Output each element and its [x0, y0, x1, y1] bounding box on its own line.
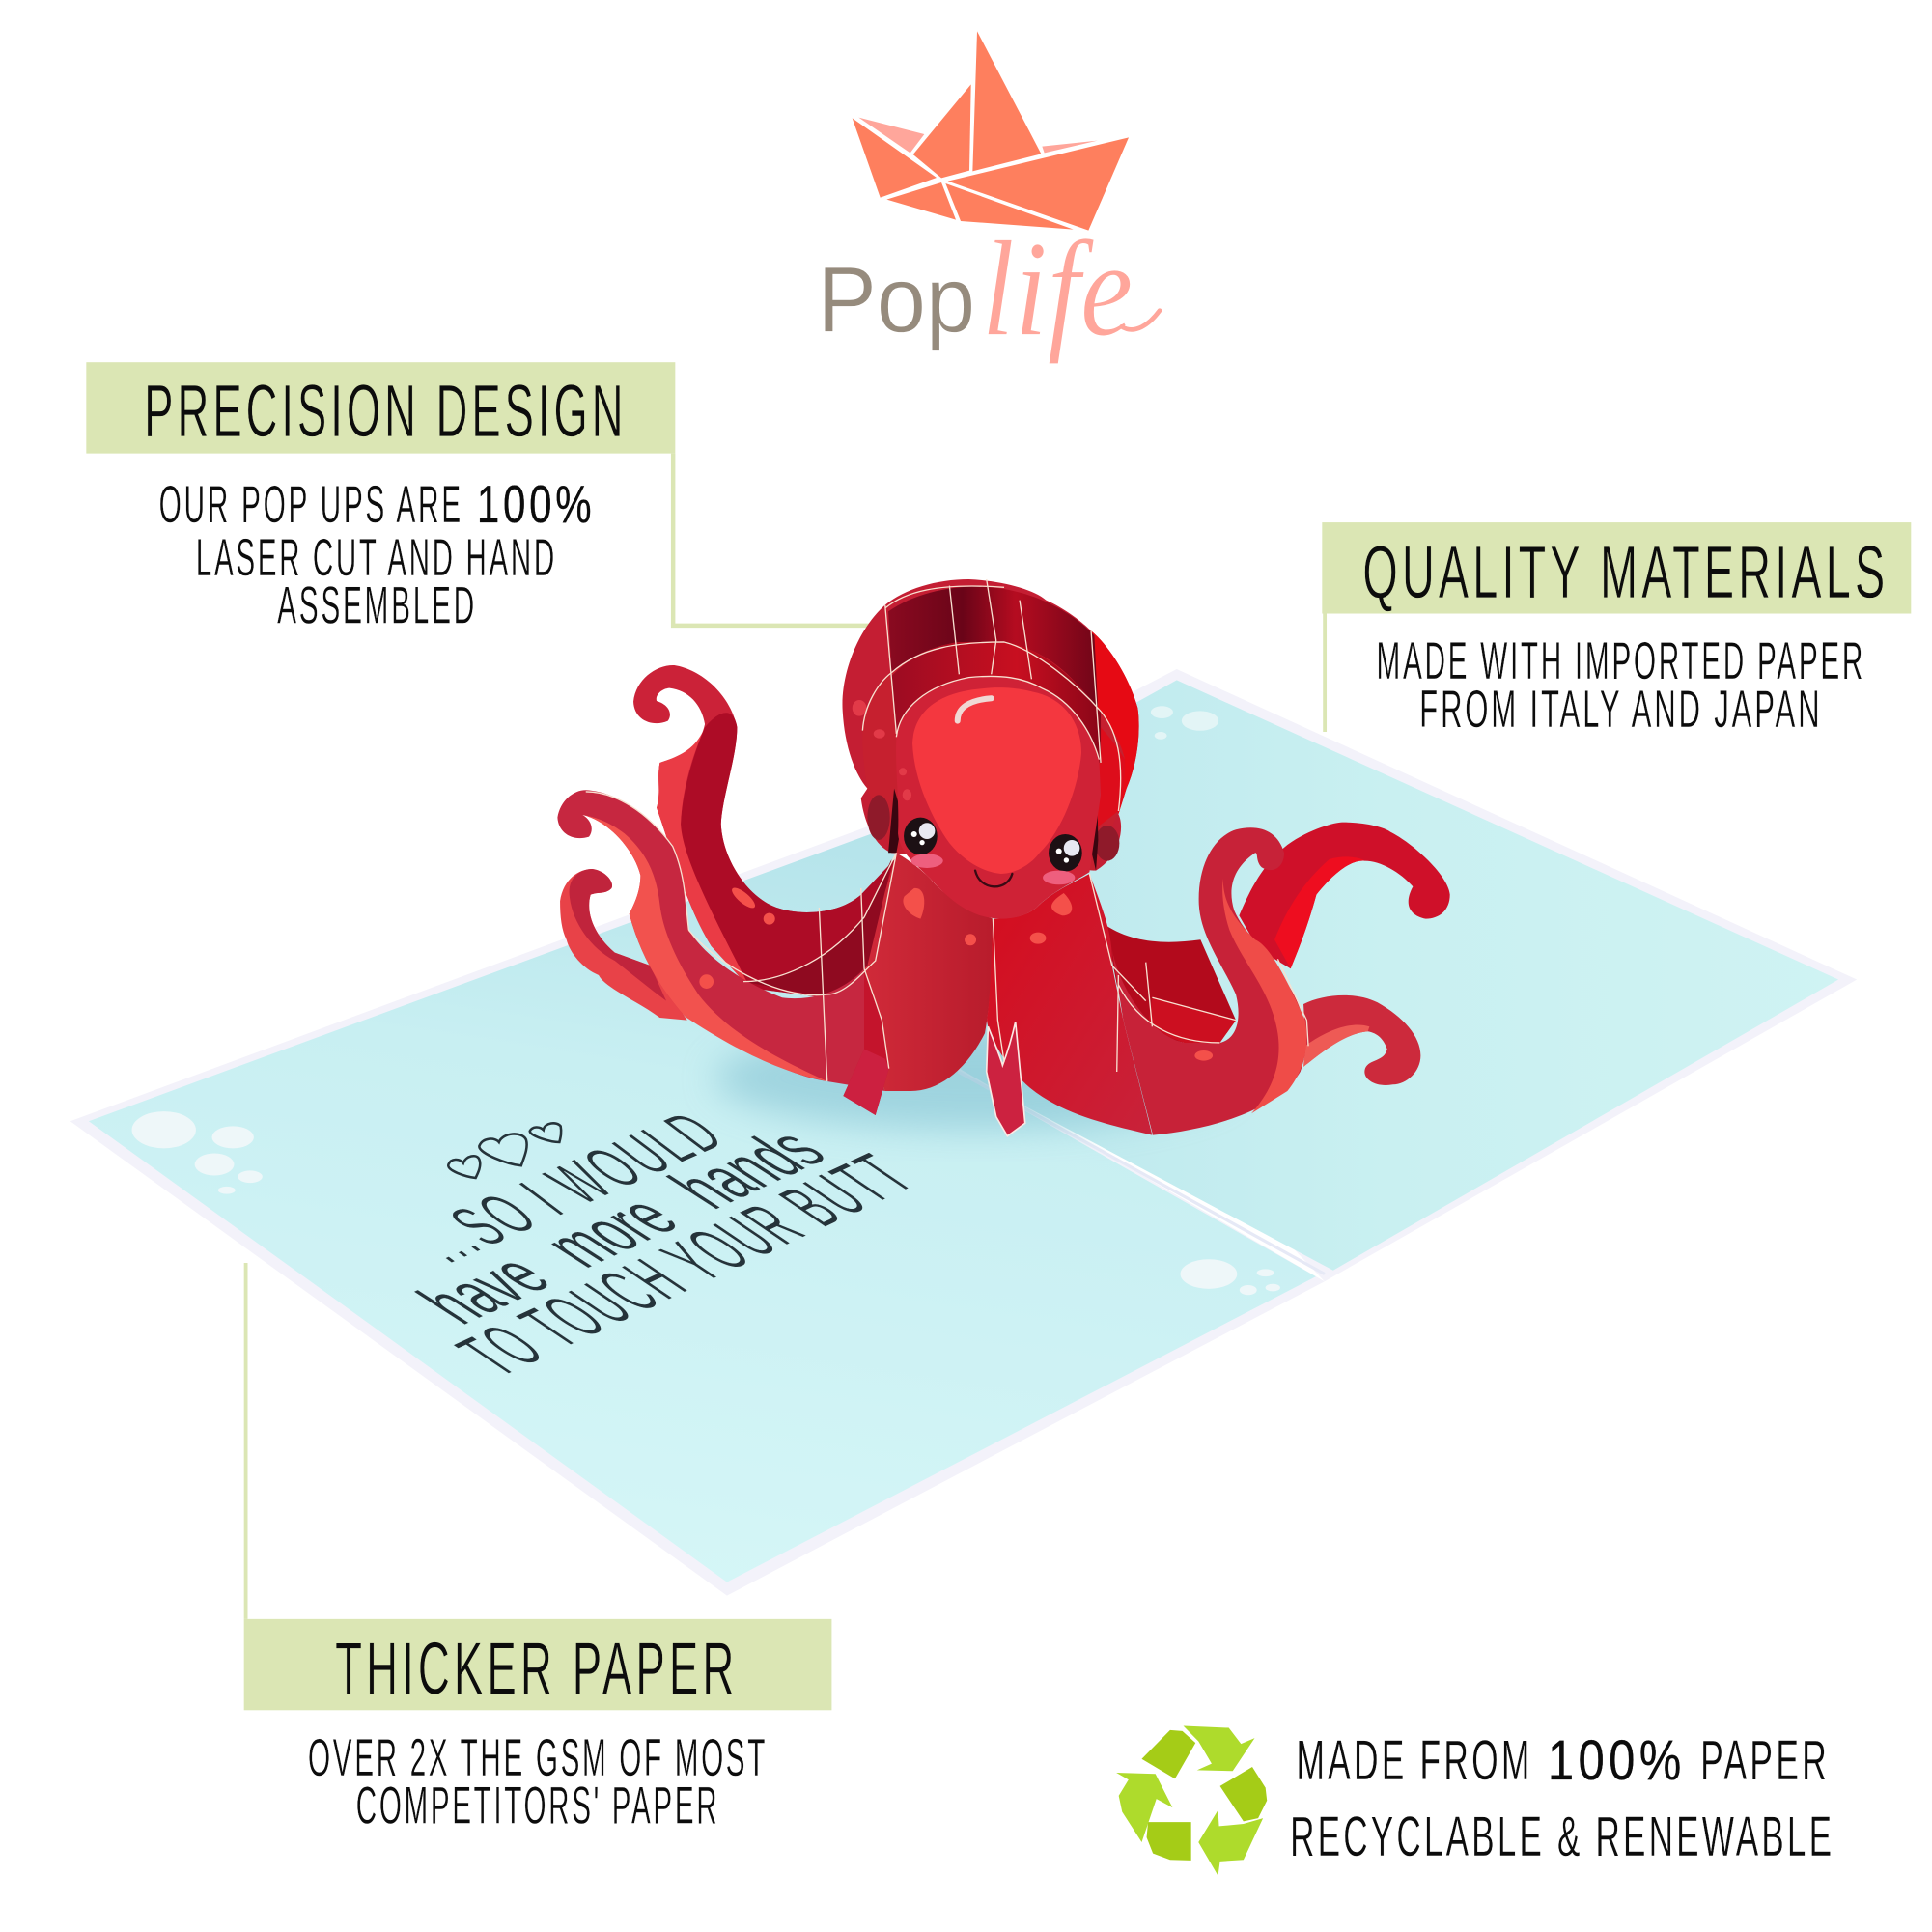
- eye: right: [1049, 834, 1082, 872]
- tab: left lower: [843, 1050, 889, 1115]
- tentacle: back right suckers: [1274, 856, 1364, 968]
- body: right lobe: [987, 874, 1152, 1135]
- body text: ASSEMBLED: [277, 575, 477, 635]
- card right page: [887, 669, 1857, 1281]
- head: back silhouette: [842, 579, 1139, 871]
- bubbles: left: [132, 1111, 263, 1194]
- tentacle: left front: [557, 790, 885, 1091]
- octopus shadow: [714, 1026, 1232, 1130]
- card left page: [70, 820, 1325, 1596]
- illustration: red pop-up octopus: [557, 579, 1450, 1136]
- body text: COMPETITORS' PAPER: [356, 1776, 719, 1835]
- icon: origami paper boat: [853, 31, 1129, 231]
- tentacle: left lower inner: [570, 869, 666, 1001]
- body text: 100%: [477, 474, 595, 534]
- head: middle ring right: [1098, 724, 1125, 827]
- recycling statement: MADE FROM: [1297, 1729, 1533, 1792]
- recycling statement: [1290, 1729, 1834, 1868]
- tentacle: back right interior: [1106, 925, 1236, 1043]
- dark slit beside face: [888, 789, 903, 853]
- card left page fill: [89, 828, 1316, 1582]
- head: back right band: [1091, 630, 1139, 814]
- tab: left: [843, 968, 889, 1115]
- bubbles: bottom right: [1181, 1259, 1280, 1295]
- body: left lobe: [864, 853, 993, 1091]
- card fold: [959, 1072, 1325, 1274]
- tentacle: back left suckers: [657, 727, 750, 988]
- card message: have more hands: [399, 1116, 845, 1335]
- head: middle interior: [891, 642, 1101, 763]
- tentacle: back left inner: [681, 713, 895, 997]
- heading band: [1322, 522, 1911, 614]
- logo wordmark tail: [1122, 311, 1160, 329]
- card message: ...SO I WOULD: [393, 1100, 743, 1274]
- body text: [308, 1727, 768, 1835]
- tab: centre: [987, 1022, 1025, 1136]
- tentacle: back left: [633, 665, 895, 997]
- tentacle: left lower: [560, 869, 687, 1021]
- head: back interior: [888, 587, 1101, 763]
- recycling statement: 100%: [1548, 1729, 1686, 1792]
- logo wordmark: life: life: [982, 213, 1133, 365]
- body text: LASER CUT AND HAND: [196, 527, 557, 587]
- connector: precision design: [673, 454, 873, 626]
- panel: thicker paper: [244, 1619, 831, 1835]
- smile: [975, 871, 1012, 886]
- icon: hearts: [448, 1123, 561, 1178]
- recycling statement: PAPER: [1700, 1729, 1830, 1792]
- dark slit right of face: [1089, 811, 1098, 871]
- connector: quality materials: [1324, 614, 1327, 732]
- bubbles: top right: [1151, 706, 1218, 740]
- cheeks: [910, 854, 1075, 884]
- paper edge lines: [586, 579, 1308, 1081]
- tentacle: back right: [1239, 823, 1450, 968]
- card message: [393, 1100, 936, 1387]
- ear shadows: [867, 795, 1119, 861]
- tentacle: right front suckers: [1222, 879, 1306, 1113]
- head side spots: [853, 700, 911, 800]
- heading band: [244, 1619, 831, 1710]
- tentacle: right front: [1112, 827, 1306, 1135]
- body text: [1376, 630, 1865, 739]
- heading: PRECISION DESIGN: [144, 371, 628, 453]
- heading: THICKER PAPER: [335, 1629, 738, 1711]
- tentacle: back left web: [743, 859, 891, 997]
- head: face ring: [896, 676, 1101, 919]
- card right page fill: [937, 680, 1838, 1271]
- heading band: [86, 362, 675, 454]
- head: middle ring: [862, 642, 1125, 871]
- tentacle: right small: [1303, 995, 1420, 1085]
- body text: OVER 2X THE GSM OF MOST: [308, 1727, 768, 1787]
- eye: left: [904, 818, 938, 854]
- logo wordmark: Pop: Pop: [818, 248, 975, 351]
- panel: quality materials: [1322, 522, 1911, 739]
- spots: [699, 884, 1213, 1061]
- head: highlight: [958, 698, 992, 721]
- body text: OUR POP UPS ARE: [159, 474, 463, 534]
- icon: recycle symbol: [1116, 1726, 1267, 1876]
- panel: pop-up card: [70, 669, 1857, 1596]
- connector: thicker paper: [244, 1263, 247, 1619]
- body text: [159, 474, 595, 635]
- logo: Poplife: [818, 31, 1160, 365]
- tentacle: right small suckers: [1303, 1025, 1369, 1067]
- panel: pop-up card: TO TOUCH YOUR BUTT: [437, 1141, 936, 1387]
- tentacle: left front suckers: [582, 815, 827, 1081]
- tentacle: back right lower band: [1149, 997, 1236, 1043]
- panel: precision design: [86, 362, 675, 635]
- head: face light: [912, 687, 1081, 874]
